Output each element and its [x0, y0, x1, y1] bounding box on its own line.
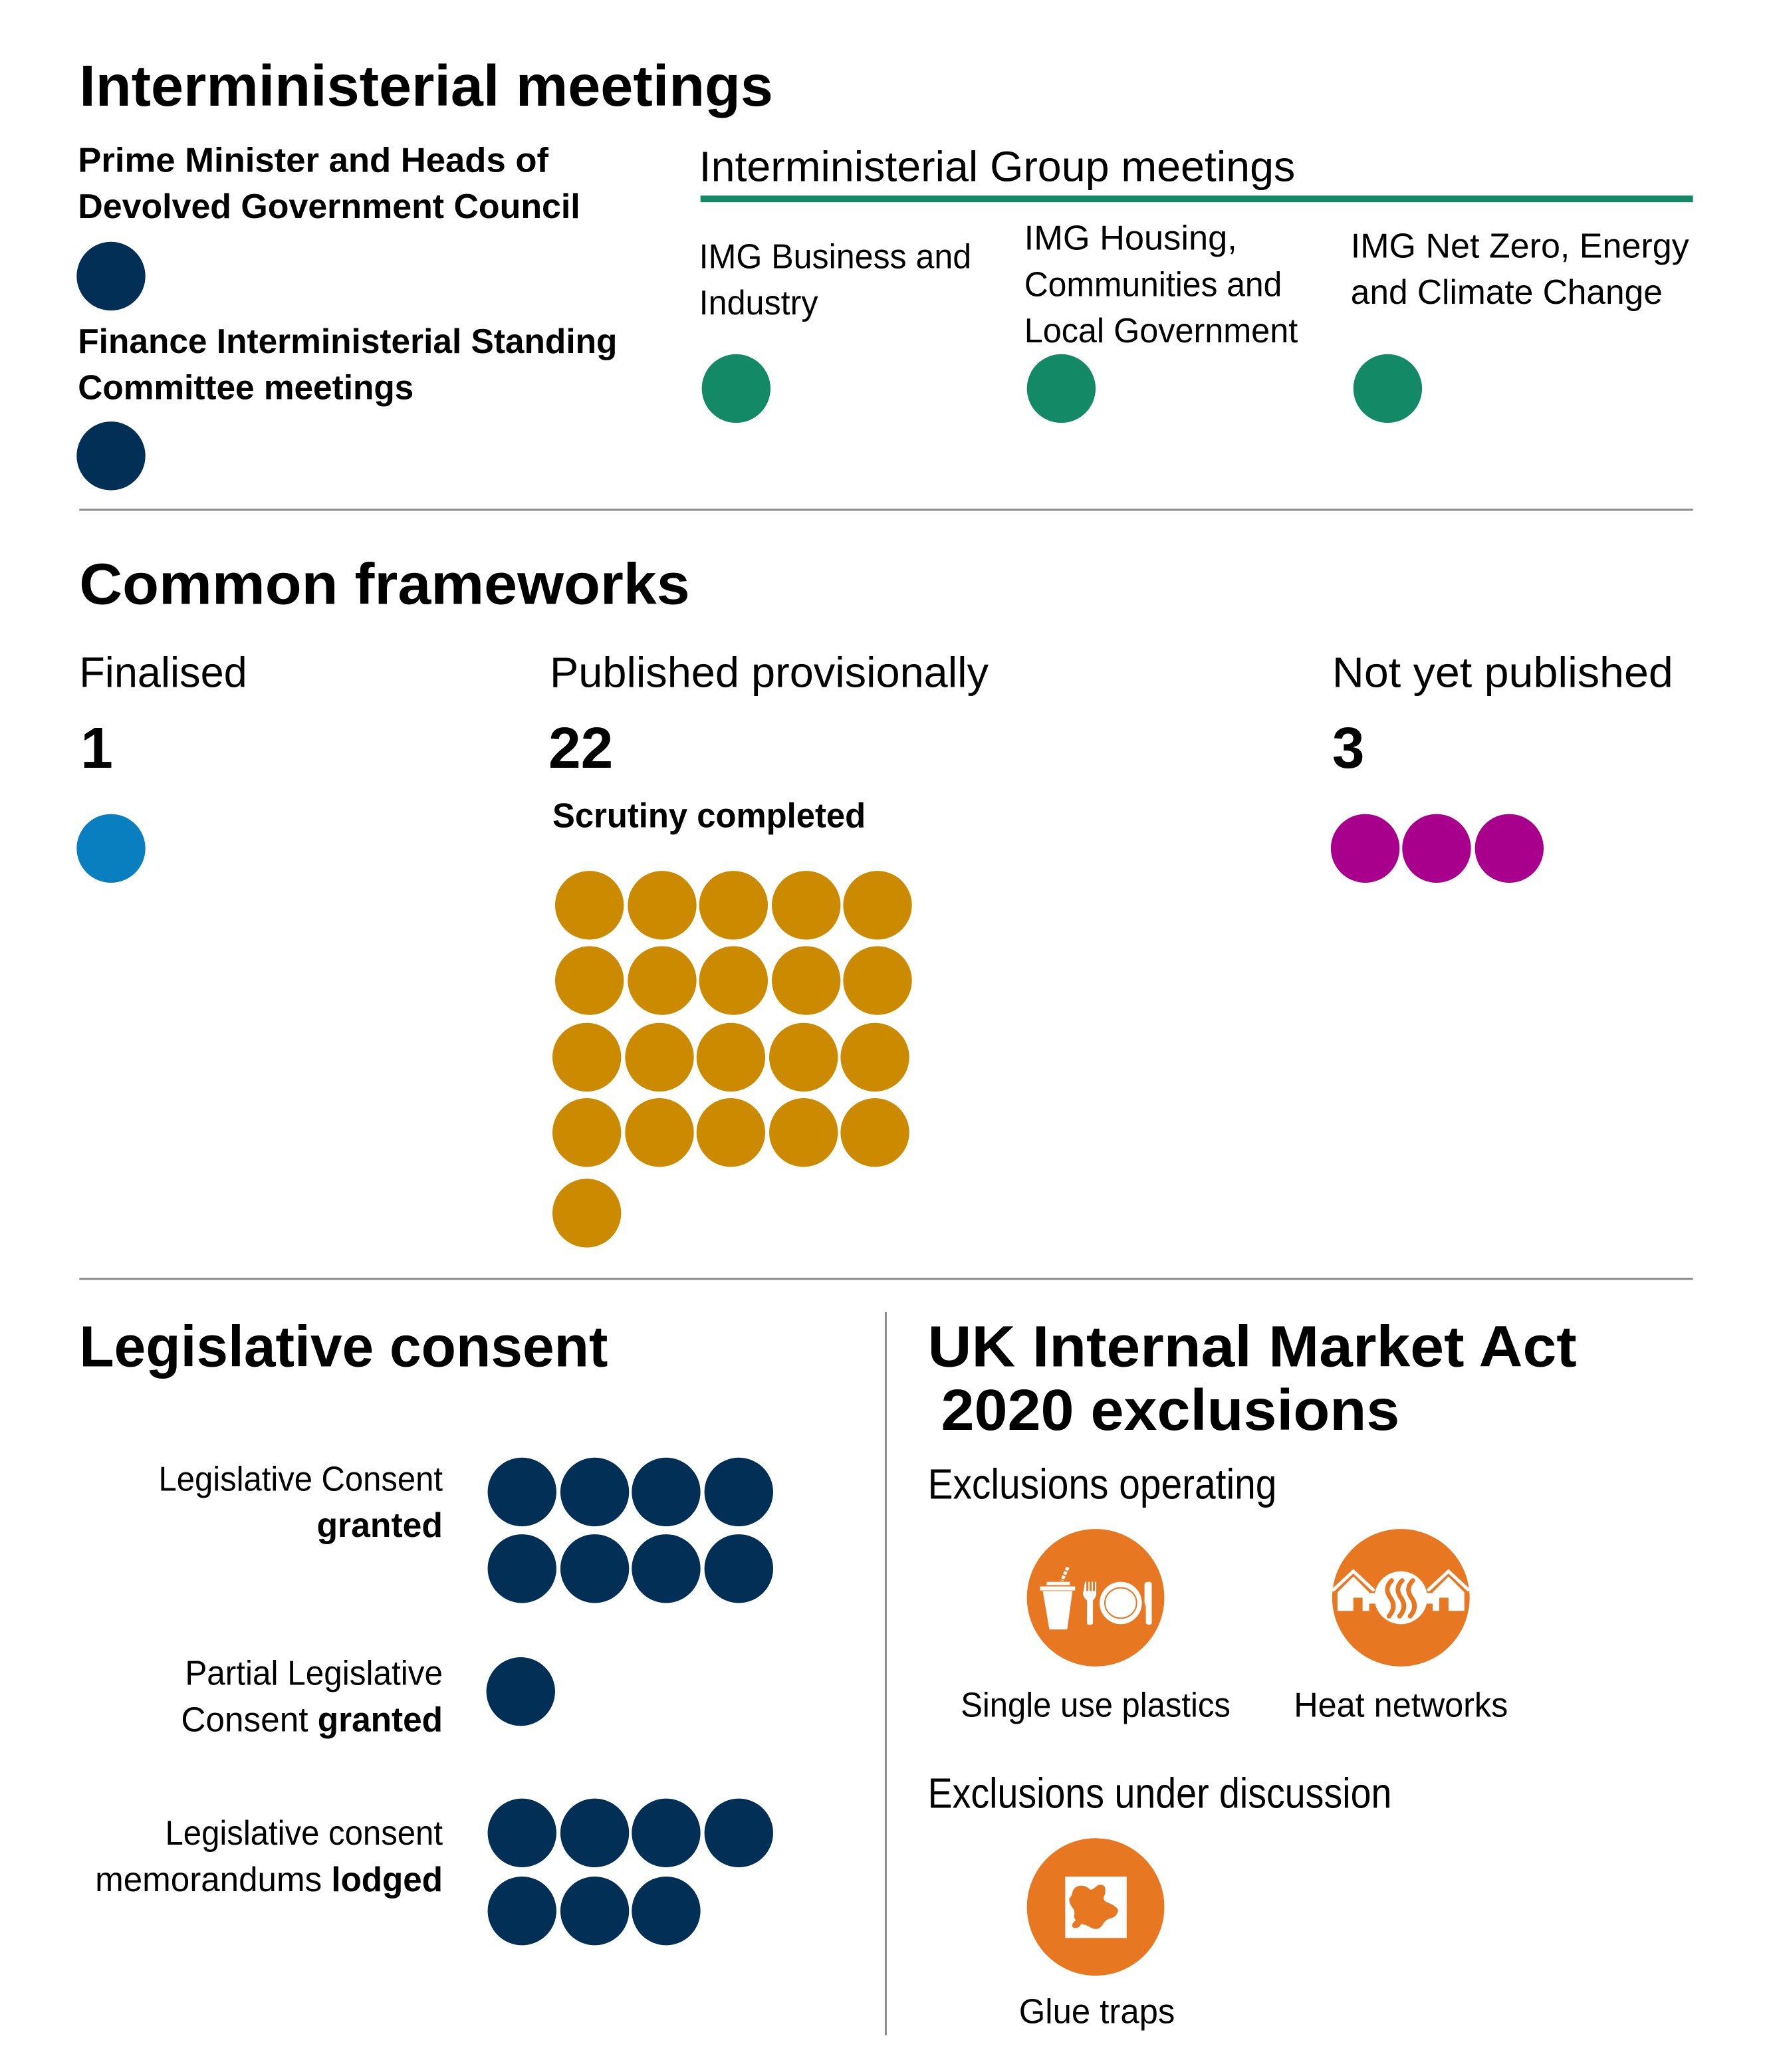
column: published provisionally: 22	[548, 715, 613, 780]
dot: IMG Housing	[1027, 354, 1096, 423]
column: not yet published: Not yet published	[1332, 649, 1673, 697]
column: published provisionally: Published provisionally	[550, 649, 989, 697]
heading: Interministerial Group meetings: Interministerial Group meetings	[699, 143, 1295, 190]
title: UK Internal Market Act 2020 exclusions	[928, 1314, 1577, 1442]
label: PM and Heads of Devolved Government Council: Devolved Government Council	[78, 187, 580, 225]
row: consent granted: Legislative Consent	[159, 1459, 443, 1498]
label: IMG Business and Industry: IMG Business and	[699, 237, 971, 276]
dot: IMG Business	[702, 354, 770, 423]
dot: IMG Net Zero	[1354, 354, 1422, 423]
label: Finance Interministerial Standing Committee	[78, 322, 617, 406]
label: PM and Heads of Devolved Government Council	[78, 140, 580, 225]
subheading: Exclusions under discussion: Exclusions under discussion	[928, 1770, 1391, 1817]
icon: heat networks	[1332, 1529, 1470, 1667]
label: IMG Housing	[1024, 219, 1298, 350]
column: not yet published	[1331, 649, 1673, 883]
row: memorandums lodged: Legislative consent	[165, 1813, 443, 1852]
label: Heat networks: Heat networks	[1294, 1685, 1508, 1724]
label: Finance Interministerial Standing Committee: Committee meetings	[78, 368, 414, 406]
dot grid: 22 scrutiny completed	[552, 871, 912, 1248]
icon: single use plastics	[1027, 1529, 1164, 1667]
row: memorandums lodged: memorandums lodged	[95, 1860, 443, 1899]
column: not yet published: 3	[1332, 715, 1365, 780]
section: UK Internal Market Act exclusions	[928, 1314, 1577, 2031]
label: PM and Heads of Devolved Government Council: Prime Minister and Heads of	[78, 140, 549, 179]
label: Glue traps: Glue traps	[1019, 1992, 1175, 2031]
title: UK Internal Market Act 2020 exclusions: 2020 exclusions	[941, 1377, 1399, 1442]
section: legislative consent	[79, 1314, 773, 1945]
row: partial consent granted: Consent granted	[181, 1700, 443, 1738]
label: Single use plastics: Single use plastics	[961, 1685, 1231, 1724]
column: finalised: 1	[80, 715, 113, 780]
dot: finance committee meeting	[76, 421, 146, 491]
column: published provisionally: Scrutiny completed	[552, 796, 866, 834]
label: Finance Interministerial Standing Committee: Finance Interministerial Standing	[78, 322, 617, 360]
column: published provisionally	[548, 649, 989, 1248]
row: partial consent granted: Partial Legislative	[185, 1654, 443, 1692]
row: partial consent granted	[181, 1654, 555, 1738]
column: finalised: Finalised	[79, 649, 247, 697]
row: memorandums lodged	[95, 1799, 773, 1945]
green rule	[701, 195, 1693, 202]
title: UK Internal Market Act 2020 exclusions: UK Internal Market Act	[928, 1314, 1577, 1379]
section: interministerial meetings	[76, 53, 1693, 491]
icon: glue traps	[1027, 1838, 1164, 1976]
section: common frameworks	[76, 552, 1673, 1248]
title: Legislative consent: Legislative consent	[79, 1314, 608, 1379]
row: consent granted	[159, 1458, 773, 1603]
title: Interministerial meetings: Interministerial meetings	[79, 53, 773, 118]
row: consent granted: granted	[316, 1506, 443, 1544]
label: IMG Business and Industry	[699, 237, 971, 322]
label: IMG Housing: Local Government	[1024, 311, 1298, 350]
label: IMG Business and Industry: Industry	[699, 283, 818, 322]
label: IMG Net Zero: IMG Net Zero, Energy	[1351, 227, 1689, 265]
dot: PM council meeting	[76, 242, 146, 310]
label: IMG Net Zero	[1351, 227, 1689, 311]
label: IMG Housing: IMG Housing,	[1024, 219, 1237, 257]
label: IMG Housing: Communities and	[1024, 265, 1282, 303]
label: IMG Net Zero: and Climate Change	[1351, 273, 1663, 311]
title: Common frameworks: Common frameworks	[79, 552, 690, 617]
column: finalised	[76, 649, 247, 883]
subheading: Exclusions operating: Exclusions operating	[928, 1460, 1276, 1508]
